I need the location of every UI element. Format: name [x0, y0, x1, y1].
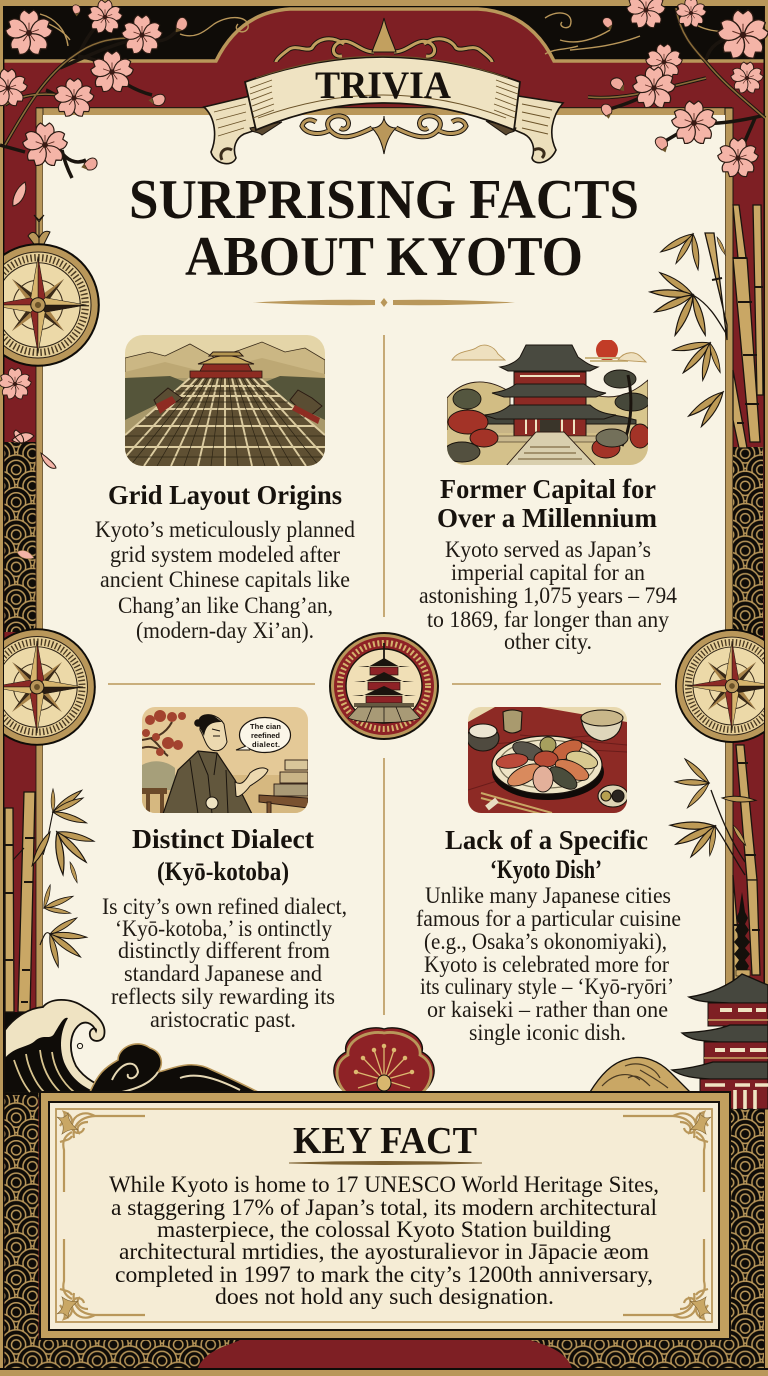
body	[95, 517, 355, 643]
body: (e.g., Osaka’s okonomiyaki),	[424, 929, 667, 954]
body: Is city’s own refined dialect,	[102, 894, 347, 919]
speech bubble: dialect.	[252, 740, 280, 749]
heading: Grid Layout Origins	[108, 480, 342, 510]
body: famous for a particular cuisine	[416, 906, 681, 931]
body: Chang’an like Chang’an,	[118, 593, 333, 618]
key fact heading: KEY FACT	[293, 1120, 477, 1162]
body: distinctly different from	[118, 938, 330, 963]
body	[416, 883, 681, 1045]
compass right	[675, 629, 768, 743]
compass left lower	[0, 628, 96, 746]
wave mound	[90, 1044, 258, 1092]
speech bubble: reefined	[251, 731, 280, 740]
body: Kyoto’s meticulously planned	[95, 517, 355, 542]
body: aristocratic past.	[150, 1007, 296, 1032]
heading: (Kyō-kotoba)	[157, 857, 289, 886]
seigaiha side strips	[0, 442, 768, 1376]
banner ribbon	[204, 18, 563, 164]
center medallion	[329, 632, 439, 740]
body: standard Japanese and	[124, 961, 322, 986]
key fact body: While Kyoto is home to 17 UNESCO World Heritage Sites,	[109, 1172, 659, 1197]
body: to 1869, far longer than any	[427, 607, 669, 632]
heading: Lack of a Specific	[445, 825, 648, 855]
palace	[484, 344, 636, 465]
ornament below banner	[302, 116, 466, 154]
illustration: Heian grid city	[125, 335, 325, 466]
cherry blossoms: top left	[0, 0, 190, 206]
fact 4: Lack of a Specific Kyoto Dish	[416, 825, 681, 1045]
fact 3: Distinct Dialect	[102, 824, 347, 1032]
left bamboo	[5, 788, 95, 1012]
body: or kaiseki – rather than one	[427, 997, 668, 1022]
body: grid system modeled after	[110, 542, 340, 567]
cherry blossoms: top right	[588, 0, 768, 179]
body: its culinary style – ‘Kyō-ryōri’	[420, 974, 674, 999]
body: ‘Kyō-kotoba,’ is ontinctly	[115, 916, 332, 941]
title	[129, 169, 639, 288]
body: other city.	[504, 629, 592, 654]
body: astonishing 1,075 years – 794	[419, 583, 677, 608]
body: Unlike many Japanese cities	[425, 883, 671, 908]
illustration: scholar speaking	[142, 707, 308, 814]
falling petals	[0, 368, 56, 559]
right bamboo upper	[650, 205, 763, 448]
heading	[437, 474, 658, 533]
key fact rule	[289, 1162, 482, 1164]
pagoda	[672, 892, 768, 1109]
body: single iconic dish.	[469, 1020, 626, 1045]
illustration: sushi meal	[467, 707, 628, 815]
golden hill	[590, 1057, 690, 1092]
ribbon main	[245, 56, 520, 130]
body: ancient Chinese capitals like	[100, 567, 350, 592]
title: ABOUT KYOTO	[185, 226, 583, 288]
dividers	[108, 335, 661, 1015]
heading: Over a Millennium	[437, 503, 658, 533]
key fact body	[109, 1172, 659, 1309]
heading	[445, 825, 648, 884]
plum crest	[334, 1028, 434, 1092]
heading: Former Capital for	[440, 474, 656, 504]
body	[419, 537, 677, 654]
speech bubble: The cian	[250, 722, 281, 731]
title divider	[253, 298, 515, 307]
body: imperial capital for an	[451, 560, 645, 585]
ornament above banner	[276, 18, 492, 62]
right bamboo lower	[670, 745, 760, 980]
banner label: TRIVIA	[315, 64, 451, 107]
great wave	[5, 1000, 258, 1092]
key fact panel	[39, 1091, 731, 1340]
fact 2: Former Capital	[419, 474, 677, 654]
fact 1: Grid Layout Origins	[95, 480, 355, 643]
trees	[444, 370, 650, 462]
key fact body: a staggering 17% of Japan’s total, its modern architectural	[111, 1195, 657, 1220]
compass left upper	[0, 215, 100, 367]
title: SURPRISING FACTS	[129, 169, 639, 231]
paper panel	[43, 115, 725, 1095]
key fact body: completed in 1997 to mark the city’s 1200th anniversary,	[115, 1262, 653, 1287]
ribbon tails	[204, 96, 563, 164]
heading	[132, 824, 314, 886]
key fact body: masterpiece, the colossal Kyoto Station building	[157, 1217, 611, 1242]
body: (modern-day Xi’an).	[136, 618, 314, 643]
key fact body: does not hold any such designation.	[215, 1284, 554, 1309]
body: reflects sily rewarding its	[111, 984, 335, 1009]
heading: ‘Kyoto Dish’	[490, 855, 602, 884]
illustration: imperial palace	[444, 339, 650, 466]
body	[102, 894, 347, 1032]
corner ornaments	[57, 1112, 711, 1319]
body: Kyoto is celebrated more for	[424, 952, 669, 977]
heading: Distinct Dialect	[132, 824, 314, 854]
body: Kyoto served as Japan’s	[445, 537, 651, 562]
speech bubble	[236, 718, 290, 752]
key fact body: architectural mrtidies, the ayosturalievor in Jāpacie æom	[119, 1239, 649, 1264]
